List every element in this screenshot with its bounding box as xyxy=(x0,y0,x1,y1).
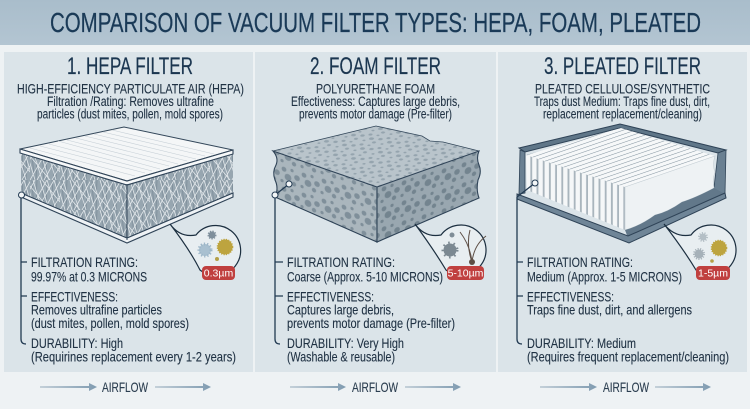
description: HIGH-EFFICIENCY PARTICULATE AIR (HEPA) xyxy=(17,80,244,96)
illustration: HEPA filter block xyxy=(20,127,233,243)
specifications: 99.97% at 0.3 MICRONS xyxy=(31,268,147,284)
specifications: prevents motor damage (Pre-filter) xyxy=(287,315,455,331)
panel background xyxy=(255,52,496,372)
heading: 2. FOAM FILTER xyxy=(310,53,441,80)
panel: HEPA filter xyxy=(4,52,253,372)
specifications: (Requirines replacement every 1-2 years) xyxy=(31,348,236,364)
callout: 0.3 micron particles: 0.3µm xyxy=(204,268,233,280)
description xyxy=(291,80,460,122)
callout: 5-10 micron particles xyxy=(415,224,486,280)
airflow indicator: pleated: AIRFLOW xyxy=(603,379,650,395)
specifications: Removes ultrafine particles xyxy=(31,302,162,318)
specifications: DURABILITY: High xyxy=(31,335,123,351)
illustration: foam block xyxy=(273,126,480,242)
specifications: Coarse (Approx. 5-10 MICRONS) xyxy=(287,268,443,284)
description: POLYURETHANE FOAM xyxy=(316,80,435,96)
airflow indicator: HEPA xyxy=(40,379,211,395)
specifications xyxy=(527,254,729,364)
airflow indicator: foam xyxy=(290,379,461,395)
description: replacement replacement/cleaning) xyxy=(543,106,702,122)
bracket connector xyxy=(18,192,27,344)
specifications: (Washable & reusable) xyxy=(287,348,395,364)
description: Effectiveness: Captures large debris, xyxy=(291,94,460,109)
specifications: FILTRATION RATING: xyxy=(287,254,395,270)
callout: 1-5 micron particles xyxy=(664,224,736,280)
bracket connector xyxy=(517,180,538,344)
specifications: EFFECTIVENESS: xyxy=(287,288,374,304)
panel: pleated filter xyxy=(498,52,747,372)
panel background xyxy=(498,52,747,372)
panel background xyxy=(4,52,253,372)
specifications: Captures large debris, xyxy=(287,302,394,318)
specifications: DURABILITY: Very High xyxy=(287,335,404,351)
callout: 0.3 micron particles xyxy=(170,224,241,280)
specifications: FILTRATION RATING: xyxy=(31,254,138,270)
illustration: pleated filter in frame xyxy=(517,124,726,243)
specifications: EFFECTIVENESS: xyxy=(31,288,118,304)
description: prevents motor damage (Pre-filter) xyxy=(299,106,452,122)
description: Filtration /Rating: Removes ultrafine xyxy=(47,94,214,109)
heading: 1. HEPA FILTER xyxy=(67,53,193,80)
description: particles (dust mites, pollen, mold spores) xyxy=(37,106,223,122)
callout: 1-5 micron particles: 1-5µm xyxy=(698,268,728,280)
specifications: Medium (Approx. 1-5 MICRONS) xyxy=(527,268,682,284)
description xyxy=(534,80,710,122)
panel: foam filter xyxy=(255,52,496,372)
callout: 5-10 micron particles: 5-10µm xyxy=(448,268,484,280)
airflow indicator: foam: AIRFLOW xyxy=(352,379,399,395)
specifications xyxy=(287,254,455,364)
specifications: EFFECTIVENESS: xyxy=(527,288,614,304)
airflow indicator: pleated xyxy=(540,379,711,395)
specifications: FILTRATION RATING: xyxy=(527,254,633,270)
description xyxy=(17,80,244,122)
airflow indicator: HEPA: AIRFLOW xyxy=(102,379,149,395)
specifications xyxy=(31,254,236,364)
specifications: DURABILITY: Medium xyxy=(527,335,636,351)
specifications: Traps fine dust, dirt, and allergens xyxy=(527,302,692,318)
header band xyxy=(0,0,750,45)
bracket connector xyxy=(272,181,292,344)
specifications: (dust mites, pollen, mold spores) xyxy=(31,315,189,331)
